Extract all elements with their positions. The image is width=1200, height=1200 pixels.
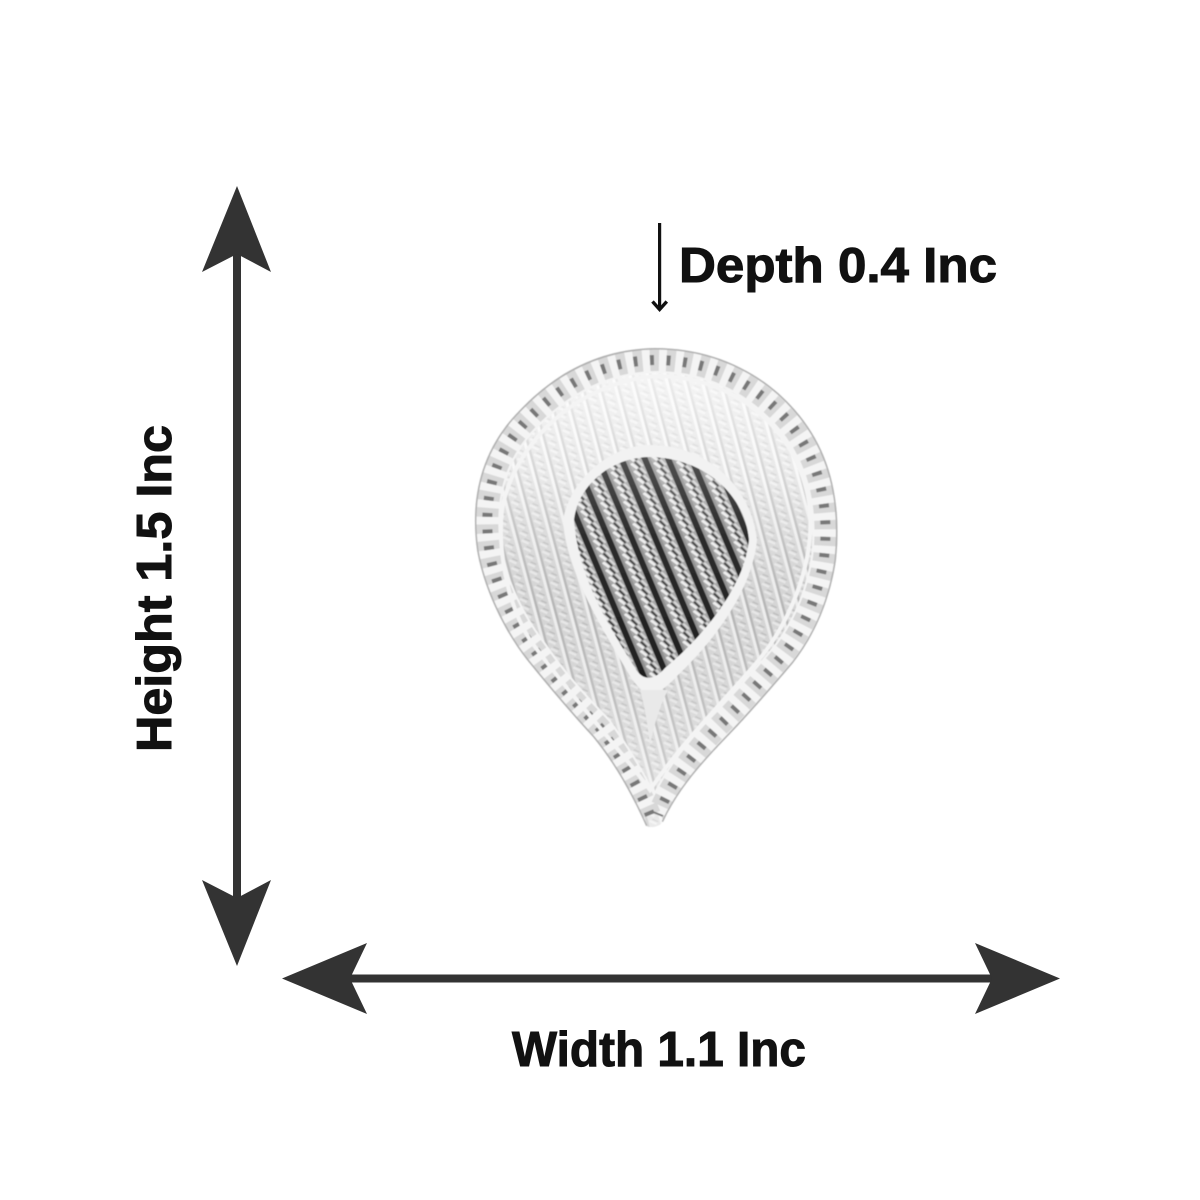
arrow: width: [282, 943, 1060, 1014]
arrow: depth: [652, 223, 667, 310]
inner hatched panel: [574, 457, 749, 678]
silver leaf product: [460, 340, 850, 830]
halo tail: [640, 690, 668, 745]
inner halo: [563, 445, 757, 696]
leaf body: [460, 340, 850, 830]
rope border: [487, 360, 825, 815]
inner border line: [501, 376, 810, 790]
arrow: height: [202, 186, 271, 966]
label: height: Height 1.5 Inc: [128, 425, 182, 752]
outer edge: [475, 348, 837, 826]
label: depth: Depth 0.4 Inc: [679, 239, 997, 293]
label: width: Width 1.1 Inc: [512, 1023, 806, 1077]
